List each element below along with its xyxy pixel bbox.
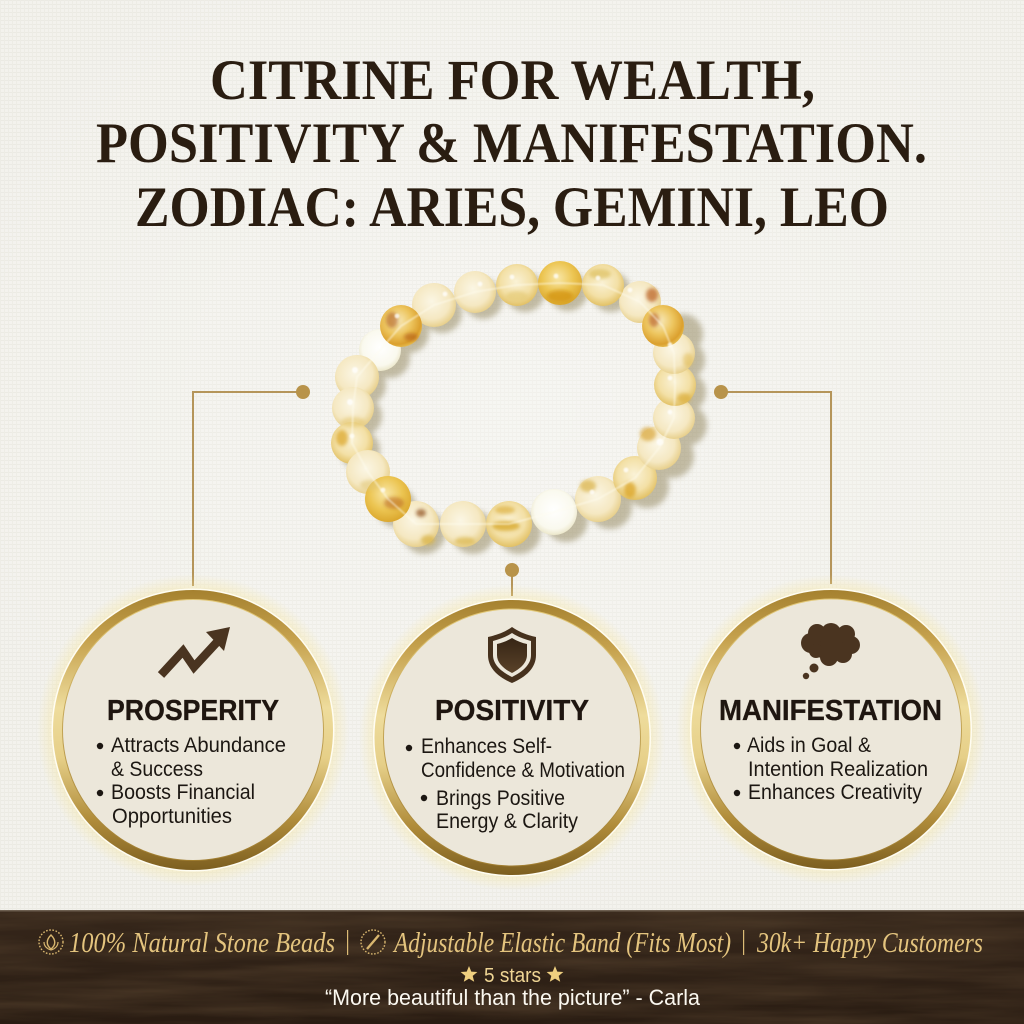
icon: leaf badge — [39, 930, 63, 954]
title — [96, 49, 927, 239]
heading: positivity: POSITIVITY — [435, 695, 589, 727]
gold ring: positivity — [373, 598, 651, 876]
title: POSITIVITY & MANIFESTATION. — [96, 112, 927, 175]
bullets: positivity: Brings Positive — [436, 786, 565, 810]
benefit: customers: 30k+ Happy Customers — [756, 928, 983, 959]
bullets: positivity: Enhances Self- — [421, 734, 552, 758]
icon: shield — [488, 627, 536, 683]
card: positivity — [359, 584, 665, 890]
icon: thought cloud — [801, 623, 860, 679]
bullets: manifestation: Intention Realization — [748, 757, 928, 781]
bullets: manifestation — [734, 733, 928, 804]
wood background — [0, 910, 1024, 1024]
divider — [347, 930, 348, 955]
card glow: prosperity — [37, 574, 349, 886]
gold ring: manifestation — [690, 588, 972, 870]
card: prosperity — [37, 574, 349, 886]
card glow: manifestation — [676, 574, 986, 884]
connector: positivity — [505, 563, 519, 596]
benefit: elastic band: Adjustable Elastic Band (Fits Most) — [392, 928, 731, 959]
bullets: manifestation: Aids in Goal & — [747, 733, 871, 757]
title: CITRINE FOR WEALTH, — [210, 49, 815, 112]
testimonial: “More beautiful than the picture” - Carla — [325, 985, 701, 1010]
benefit: natural stone: 100% Natural Stone Beads — [69, 928, 335, 959]
bullets: prosperity — [97, 733, 286, 828]
bullets: positivity: Energy & Clarity — [436, 809, 578, 833]
bullets: prosperity: Boosts Financial — [111, 780, 255, 804]
rating: 5 stars — [484, 965, 541, 987]
icon: rising arrow — [161, 627, 230, 675]
bullets: positivity: Confidence & Motivation — [421, 758, 625, 782]
citrine bracelet — [331, 261, 707, 554]
bullets: prosperity: Attracts Abundance — [111, 733, 286, 757]
connector: manifestation — [714, 385, 831, 584]
footer band — [0, 910, 1024, 1024]
rating — [461, 965, 563, 987]
title: ZODIAC: ARIES, GEMINI, LEO — [135, 176, 889, 239]
bullets: prosperity: Opportunities — [112, 804, 232, 828]
connector: prosperity — [193, 385, 310, 586]
heading: manifestation: MANIFESTATION — [719, 695, 942, 727]
heading: prosperity: PROSPERITY — [107, 695, 279, 727]
icon: elastic band badge — [361, 930, 385, 954]
card glow: positivity — [359, 584, 665, 890]
bullets: prosperity: & Success — [111, 757, 203, 781]
bullets: manifestation: Enhances Creativity — [748, 780, 922, 804]
gold ring: prosperity — [52, 588, 334, 872]
bullets: positivity — [406, 734, 625, 833]
divider — [743, 930, 744, 955]
card: manifestation — [676, 574, 986, 884]
